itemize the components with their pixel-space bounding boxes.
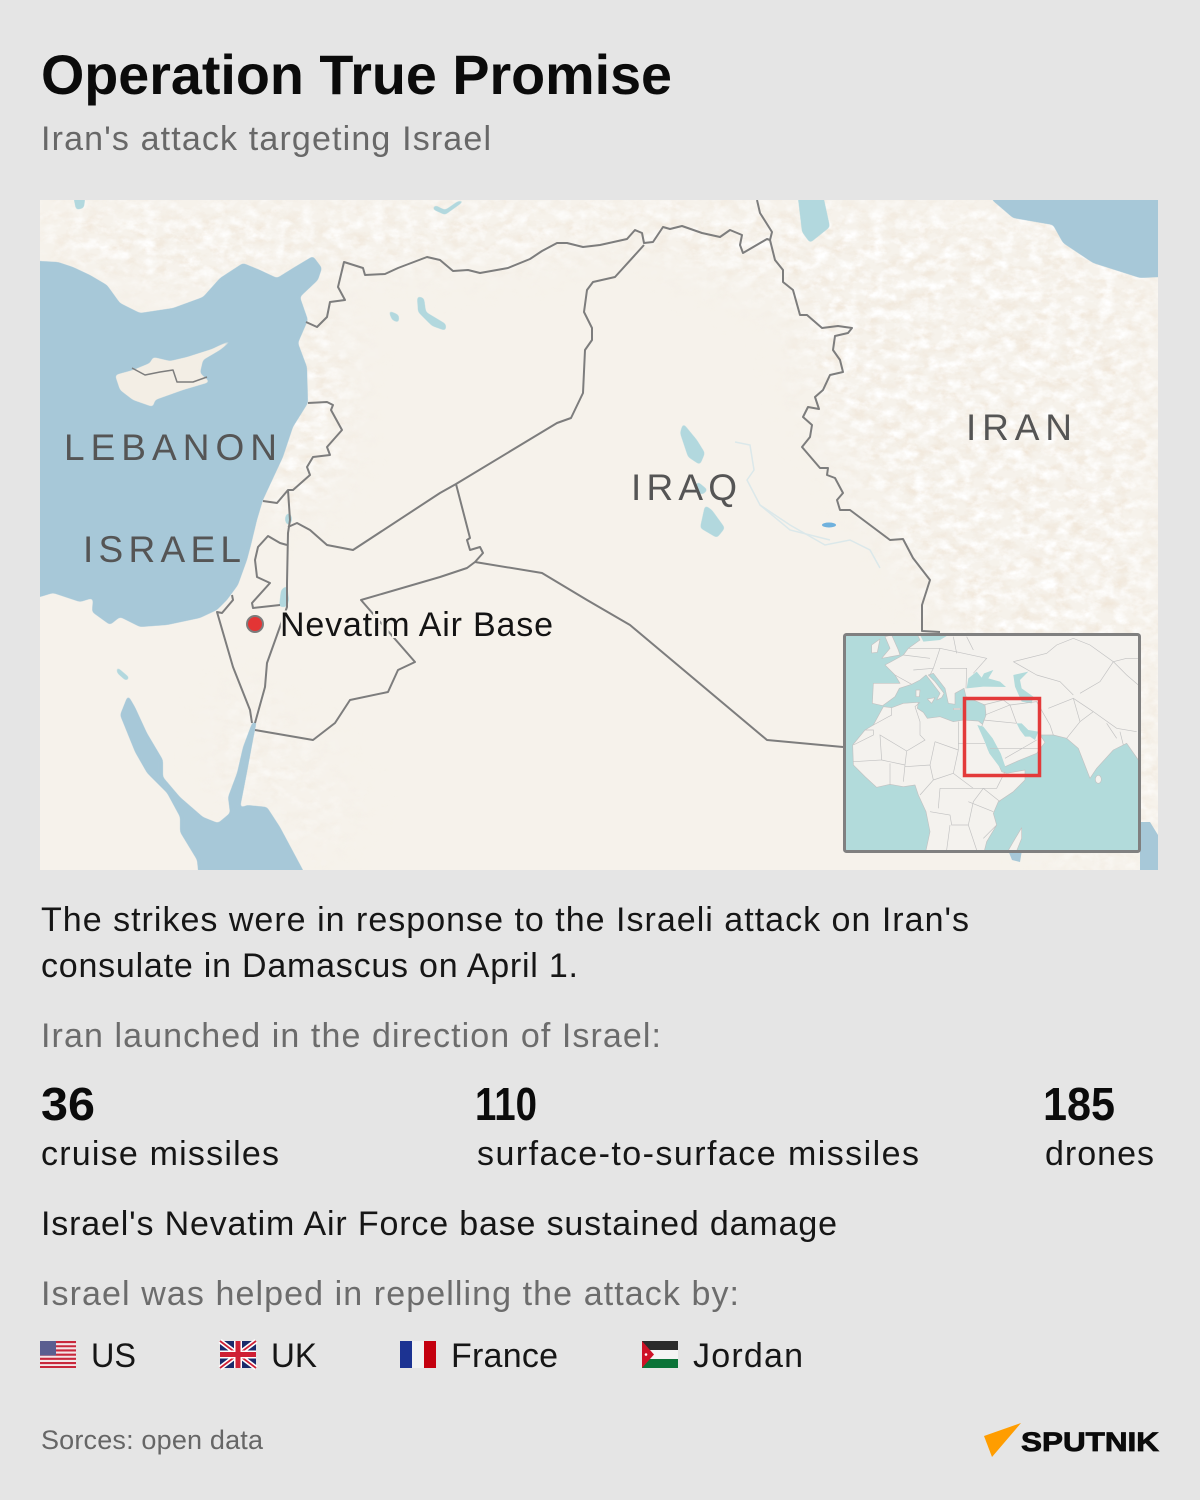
helper: US: US <box>91 1337 136 1375</box>
sea: Caspian <box>992 180 1180 278</box>
panel: map <box>10 180 1180 890</box>
helper: UK: UK <box>271 1337 317 1375</box>
label: Israel: ISRAEL <box>83 529 241 570</box>
island: Cyprus <box>116 342 228 406</box>
helper: Jordan: Jordan <box>693 1337 803 1375</box>
helper: France: France <box>451 1337 558 1375</box>
label: Iraq: IRAQ <box>631 467 737 508</box>
icon: US flag <box>40 1341 76 1368</box>
stat: cruise missiles: 36 <box>41 1078 95 1130</box>
source note: Sorces: open data <box>41 1425 264 1455</box>
icon: France flag <box>400 1341 436 1368</box>
subtitle: Iran's attack targeting Israel <box>41 120 491 158</box>
logo: Sputnik: SPUTNIK <box>1021 1427 1160 1457</box>
stat: surface-to-surface missiles <box>475 1078 919 1173</box>
stat: cruise missiles: cruise missiles <box>41 1135 279 1173</box>
lake: Hawizeh <box>822 522 836 528</box>
helper: France <box>400 1337 558 1375</box>
helper: US <box>40 1337 136 1375</box>
heading: helpers: Israel was helped in repelling the attack by: <box>41 1275 739 1313</box>
label: Iran: IRAN <box>966 407 1072 448</box>
helper: UK <box>220 1337 317 1375</box>
icon: Jordan flag <box>642 1341 678 1368</box>
inset highlight square <box>964 698 1040 776</box>
panel: locator inset map <box>844 630 1143 855</box>
inset seas <box>920 635 1038 774</box>
stat: surface-to-surface missiles: surface-to-surface missiles <box>477 1135 919 1173</box>
sea: Mediterranean <box>40 257 322 627</box>
logo: Sputnik <box>984 1423 1160 1457</box>
terrain relief <box>40 200 1158 870</box>
title: Operation True Promise <box>41 43 672 106</box>
land base <box>40 200 1158 870</box>
text block: intro: consulate in Damascus on April 1. <box>41 947 578 985</box>
label: Nevatim Air Base: Nevatim Air Base <box>280 606 553 644</box>
sea: Red Sea gulfs <box>120 695 312 890</box>
stat: drones <box>1043 1078 1154 1173</box>
text block: intro: The strikes were in response to the Israeli attack on Iran's <box>41 901 969 939</box>
seas <box>10 180 1180 890</box>
stat: drones: drones <box>1045 1135 1154 1173</box>
rivers <box>735 442 880 568</box>
stat: drones: 185 <box>1043 1078 1115 1130</box>
icon: UK flag <box>220 1341 256 1368</box>
sea behind inset <box>1008 822 1158 870</box>
stat: cruise missiles <box>41 1078 279 1173</box>
label: Lebanon: LEBANON <box>64 427 277 468</box>
heading: launched: Iran launched in the direction of Israel: <box>41 1017 661 1055</box>
text block: damage: Israel's Nevatim Air Force base sustained damage <box>41 1205 837 1243</box>
icon: orange arrow <box>984 1423 1021 1457</box>
marker: Nevatim Air Base <box>247 616 263 632</box>
helper: Jordan <box>642 1337 803 1375</box>
inset land <box>853 630 1143 855</box>
stat: surface-to-surface missiles: 110 <box>475 1078 537 1130</box>
country borders <box>132 200 940 747</box>
inset borders <box>853 637 1138 850</box>
lakes <box>72 190 830 681</box>
text block: intro <box>41 901 969 985</box>
